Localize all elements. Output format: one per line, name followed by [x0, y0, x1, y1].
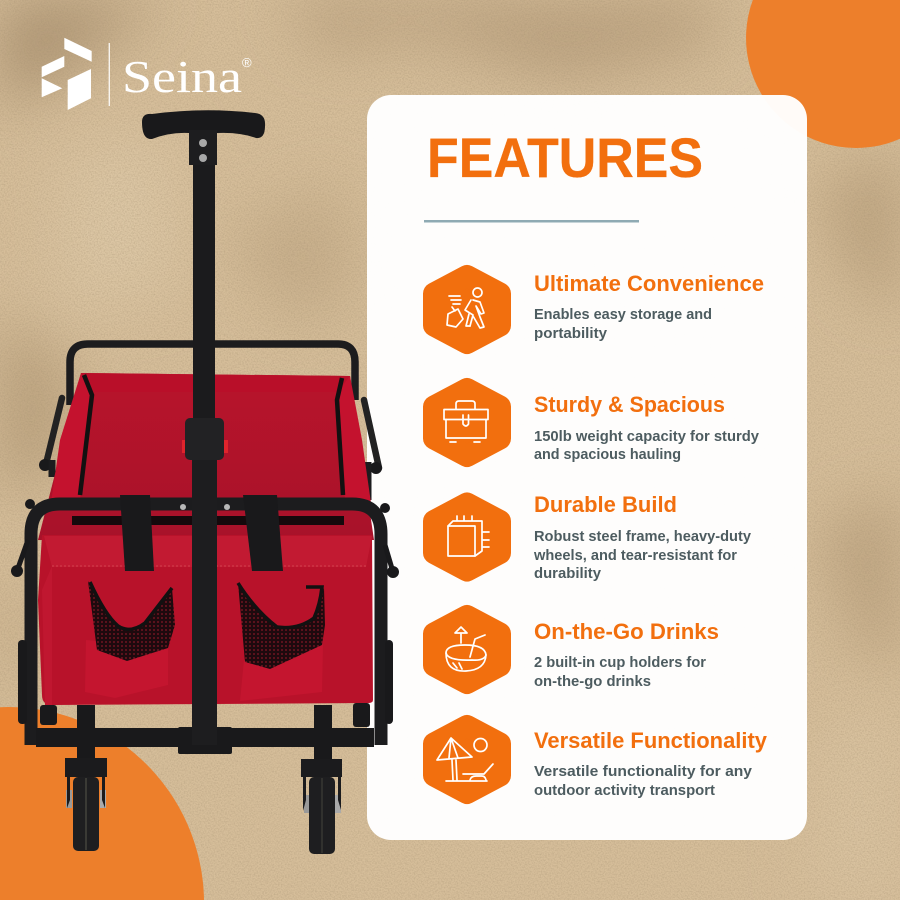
right caster wheel [301, 705, 342, 854]
wagon bottom axle [36, 727, 374, 754]
feature: Sturdy & Spacious [434, 389, 759, 463]
description: wheels, and tear-resistant for [533, 548, 737, 564]
decorative orange circle: top right [746, 0, 900, 148]
heading: Durable Build [534, 492, 677, 517]
description [534, 307, 712, 342]
title divider [424, 220, 639, 222]
wagon front frame [31, 504, 381, 745]
panel: features card [367, 95, 807, 840]
left cup holder pocket [85, 581, 175, 698]
description: Versatile functionality for any [534, 764, 752, 780]
icon: coconut drink [434, 616, 500, 683]
right cup holder pocket [238, 583, 325, 701]
description: portability [534, 326, 607, 342]
wagon outer legs and knobs [11, 499, 399, 727]
icon: toolbox [434, 389, 500, 456]
feature: Versatile Functionality [434, 726, 767, 799]
description: outdoor activity transport [534, 783, 715, 799]
logo: Seina: ® [242, 55, 252, 70]
description: 150lb weight capacity for sturdy [534, 429, 759, 445]
feature: Durable Build [434, 492, 751, 582]
feature: On-the-Go Drinks [434, 616, 719, 690]
description: Enables easy storage and [534, 307, 712, 323]
logo mark [42, 38, 92, 110]
heading: Sturdy & Spacious [534, 392, 725, 417]
title: FEATURES [427, 126, 703, 189]
logo wordmark: Seina [122, 51, 242, 102]
decorative orange circle: bottom left [0, 707, 204, 900]
wagon basket interior [38, 373, 374, 540]
feature: Ultimate Convenience [434, 271, 764, 343]
wagon front fabric [38, 535, 373, 705]
description [534, 429, 759, 463]
wagon rear side arms [39, 398, 382, 500]
description: Robust steel frame, heavy-duty [534, 529, 751, 545]
logo: Seina [42, 38, 252, 110]
product: red folding wagon [11, 110, 399, 854]
heading: On-the-Go Drinks [534, 619, 719, 644]
wagon rear frame [70, 344, 355, 405]
description [534, 764, 752, 799]
description: 2 built-in cup holders for [534, 655, 706, 671]
heading: Ultimate Convenience [534, 271, 764, 296]
description [533, 529, 751, 582]
description [534, 655, 706, 690]
description: and spacious hauling [534, 447, 681, 463]
left caster wheel [65, 705, 107, 851]
icon: beach umbrella and lounger [434, 726, 500, 793]
description: durability [534, 566, 601, 582]
wagon straps [120, 495, 283, 571]
description: on-the-go drinks [534, 674, 651, 690]
telescoping handle [142, 110, 265, 745]
icon: traveler with luggage [434, 276, 500, 343]
heading: Versatile Functionality [534, 728, 767, 753]
icon: layered steel frame [434, 504, 500, 570]
